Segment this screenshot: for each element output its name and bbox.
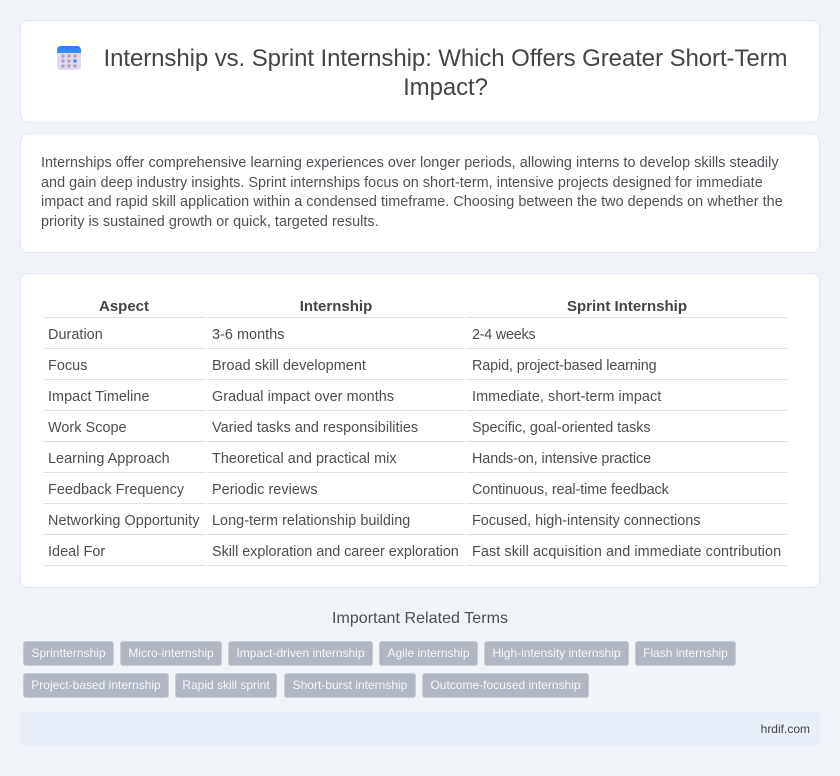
comparison table: Broad skill development — [212, 358, 366, 374]
footer bar — [20, 712, 820, 746]
text block: introduction — [41, 155, 783, 230]
comparison table: Theoretical and practical mix — [212, 451, 397, 467]
related term tags — [23, 641, 736, 698]
comparison table: Rapid, project-based learning — [472, 358, 657, 374]
text block: introduction: priority is sustained growth or quick, targeted results. — [41, 214, 379, 230]
icon: calendar — [57, 46, 81, 70]
text block: introduction: impact and rapid skill application within a condensed timeframe. Choosing between the two depends on whether the — [41, 194, 783, 210]
related term tags: Outcome-focused internship — [430, 678, 581, 692]
comparison table: Focused, high-intensity connections — [472, 513, 700, 529]
panel: title card — [20, 20, 820, 123]
related term tags: High-intensity internship — [492, 646, 621, 660]
comparison table: Ideal For — [48, 544, 105, 560]
comparison table: Gradual impact over months — [212, 389, 394, 405]
related term tags: Flash internship — [643, 646, 728, 660]
text block: introduction: Internships offer comprehensive learning experiences over longer periods, allowing interns to develop skills steadily — [41, 155, 779, 171]
comparison table: Work Scope — [48, 420, 127, 436]
related term tags: Impact-driven internship — [236, 646, 365, 660]
comparison table: Skill exploration and career exploration — [212, 544, 459, 560]
comparison table: Hands-on, intensive practice — [472, 451, 651, 467]
related term tags: Short-burst internship — [293, 678, 407, 692]
panel: introduction card — [20, 133, 820, 253]
panel: comparison table card — [20, 273, 820, 588]
related term tags: Project-based internship — [31, 678, 161, 692]
comparison table: Duration — [48, 327, 103, 343]
title: Internship vs. Sprint Internship: Which Offers Greater Short-Term — [104, 45, 787, 72]
title: Impact? — [403, 74, 488, 101]
related term tags: Micro-internship — [128, 646, 214, 660]
comparison table: Long-term relationship building — [212, 513, 410, 529]
comparison table: Periodic reviews — [212, 482, 318, 498]
comparison table: Specific, goal-oriented tasks — [472, 420, 651, 436]
comparison table: Immediate, short-term impact — [472, 389, 661, 405]
comparison table: Varied tasks and responsibilities — [212, 420, 418, 436]
heading: important related terms: Important Related Terms — [332, 610, 508, 627]
comparison table: 3-6 months — [212, 327, 284, 343]
footer source: hrdif.com — [761, 722, 810, 736]
comparison table: Sprint Internship — [567, 298, 687, 315]
comparison table: Focus — [48, 358, 87, 374]
comparison table: Learning Approach — [48, 451, 170, 467]
comparison table — [43, 298, 787, 566]
comparison table: Feedback Frequency — [48, 482, 184, 498]
related term tags: Sprintternship — [31, 646, 106, 660]
comparison table: 2-4 weeks — [472, 327, 535, 343]
comparison table: Internship — [300, 298, 372, 315]
comparison table: Aspect — [99, 298, 149, 315]
comparison table: Impact Timeline — [48, 389, 150, 405]
title — [104, 45, 787, 101]
comparison table: Fast skill acquisition and immediate contribution — [472, 544, 781, 560]
comparison table: Networking Opportunity — [48, 513, 199, 529]
related term tags: Agile internship — [387, 646, 470, 660]
text block: introduction: and gain deep industry insights. Sprint internships focus on short-term, intensive projects designed for immediate — [41, 174, 763, 190]
comparison table: Continuous, real-time feedback — [472, 482, 669, 498]
related term tags: Rapid skill sprint — [182, 678, 270, 692]
